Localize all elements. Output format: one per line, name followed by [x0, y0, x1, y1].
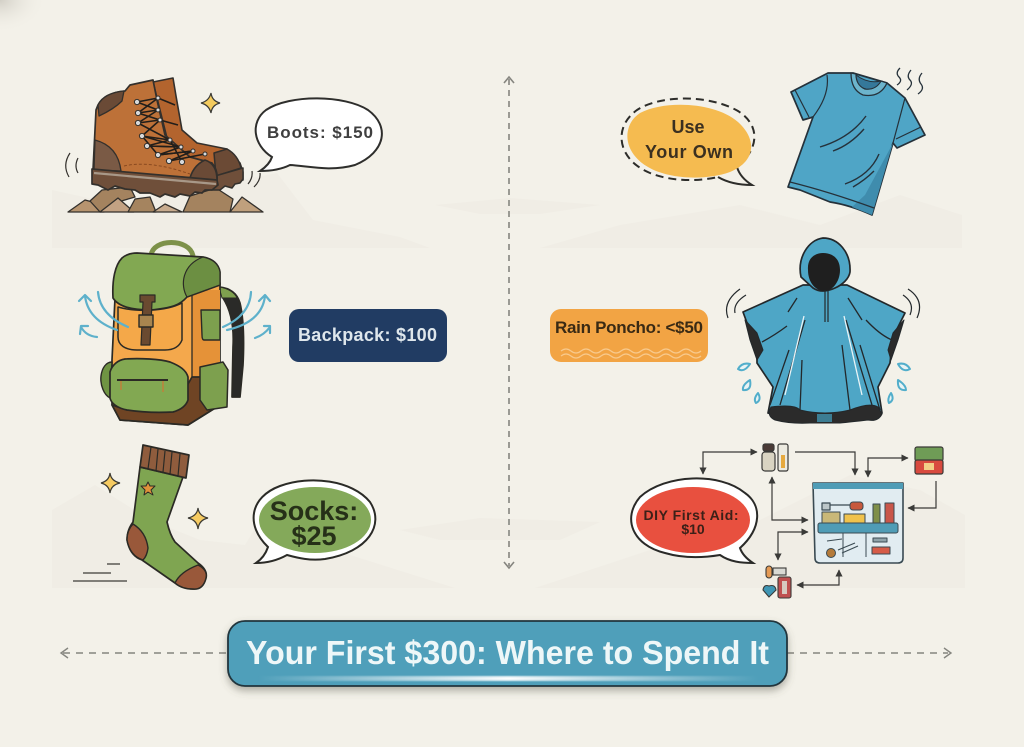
lower pocket: [101, 362, 112, 398]
callout: use your own: Use: [671, 117, 705, 137]
title banner: [228, 621, 787, 686]
cuff: [140, 445, 189, 478]
toe patch: [175, 565, 206, 589]
side pocket upper: [201, 310, 220, 340]
star patch: [141, 482, 155, 495]
icon: rain poncho: [726, 238, 920, 423]
single-headed arrows: [795, 452, 936, 508]
label: backpack price: Backpack: $100: [298, 325, 437, 345]
callout: DIY first aid price: $10: [681, 521, 705, 537]
heel patch: [127, 524, 148, 560]
water drops: [738, 364, 910, 403]
icon: first aid kit diagram: [703, 444, 943, 598]
motion marks: [726, 289, 920, 318]
back boot: [153, 78, 243, 186]
haul handle: [151, 242, 193, 256]
speed lines: [73, 564, 127, 581]
icon: sparkles near sock: [101, 473, 208, 529]
rocks: [68, 187, 263, 212]
callout: socks price: Socks:: [270, 496, 358, 526]
vertical dashed divider arrow: [504, 77, 514, 568]
blue airflow arrows: [79, 292, 270, 338]
icon: t-shirt: [788, 68, 925, 215]
cape: [743, 285, 905, 422]
label: rain poncho price: Rain Poncho: <$50: [555, 318, 703, 337]
shirt body: [788, 73, 925, 215]
left dashed arrow: [61, 648, 228, 658]
callout: boots price: [256, 98, 382, 171]
icon: backpack: [79, 242, 270, 425]
callout: use your own: Your Own: [645, 142, 733, 162]
callout: use your own: [622, 98, 754, 185]
sock body: [127, 467, 206, 589]
shoulder strap: [219, 287, 244, 397]
top lid: [113, 253, 220, 310]
label: backpack price: [289, 309, 447, 362]
motion marks: [66, 153, 260, 187]
bottom brown panel: [112, 377, 220, 425]
red and green tin: [915, 447, 943, 474]
buckle strap: [140, 295, 155, 345]
bottle and vial: [762, 444, 788, 471]
main body: [112, 283, 220, 425]
label: rain poncho price: [550, 309, 708, 362]
hem: [769, 405, 882, 423]
callout: DIY first aid price: [631, 478, 757, 563]
icon: sparkle near boots: [201, 93, 220, 113]
callout: socks price: [254, 480, 375, 563]
boot sole: [92, 169, 218, 197]
connector arrows: [703, 452, 908, 585]
title banner: Your First $300: Where to Spend It: [246, 634, 769, 671]
front boot upper: [93, 80, 217, 180]
collar: [851, 73, 887, 96]
sleeve and hem seams: [790, 75, 921, 208]
folds: [820, 116, 879, 187]
callout: DIY first aid price: DIY First Aid:: [644, 507, 738, 523]
right lower pocket: [200, 362, 228, 410]
hood opening: [808, 253, 840, 291]
stink lines: [897, 68, 922, 94]
callout: socks price: $25: [291, 521, 337, 551]
callout: boots price: Boots: $150: [267, 123, 373, 142]
right dashed arrow: [787, 648, 951, 658]
front flap: [118, 303, 182, 350]
small supplies: [763, 566, 791, 598]
icon: sock: [73, 445, 206, 589]
hood: [800, 238, 850, 291]
side shadows: [745, 320, 904, 360]
zip bag: [813, 483, 903, 563]
icon: hiking boots on rocks: [66, 78, 263, 212]
zip and folds: [825, 290, 828, 322]
laces: [137, 98, 205, 162]
